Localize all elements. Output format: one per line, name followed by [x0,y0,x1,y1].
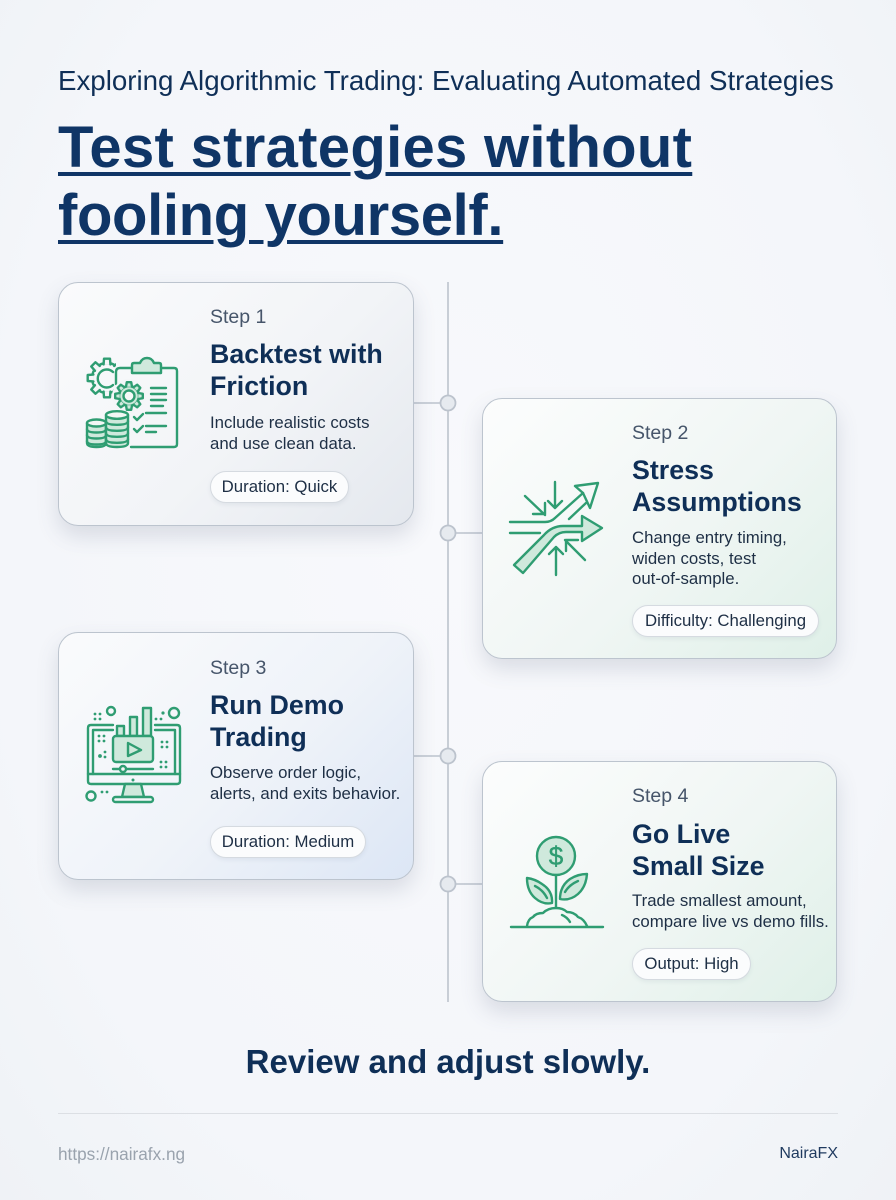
description: Change entry timing, [632,528,787,547]
description [632,528,787,588]
description: out-of-sample. [632,569,739,588]
description: and use clean data. [210,434,356,453]
heading [210,339,383,401]
icon: monitor with video chart [85,706,182,804]
icon: stress arrows [508,480,604,576]
heading: Trading [210,722,307,752]
pill: Duration: Quick [222,477,337,496]
title: fooling yourself. [58,182,503,248]
description [210,763,400,803]
icon: money plant [510,836,604,928]
panel: step 3 [58,632,414,880]
heading: Assumptions [632,487,802,517]
description: compare live vs demo fills. [632,912,829,931]
step label: Step 1 [210,306,266,328]
subtitle: Exploring Algorithmic Trading: Evaluating Automated Strategies [58,65,834,96]
heading: Run Demo [210,690,344,720]
panel: step 2 [482,398,837,659]
description: Observe order logic, [210,763,361,782]
footer url: https://nairafx.ng [58,1144,185,1164]
description [632,891,829,931]
icon: clipboard gears coins [86,356,178,448]
description [210,413,370,453]
description: alerts, and exits behavior. [210,784,400,803]
pill [210,471,349,503]
pill [632,605,819,637]
heading: Stress [632,455,714,485]
panel: step 4 [482,761,837,1002]
step label: Step 3 [210,657,266,679]
description: widen costs, test [632,549,756,568]
panel: step 1 [58,282,414,526]
title [58,115,692,248]
pill: Duration: Medium [222,832,354,851]
pill [632,948,751,980]
dollar sign: $ [549,841,564,871]
closing line: Review and adjust slowly. [246,1043,650,1080]
heading [210,690,344,752]
footer divider [58,1113,838,1114]
footer brand: NairaFX [779,1145,838,1162]
heading [632,455,802,517]
step label: Step 2 [632,422,688,444]
heading: Backtest with [210,339,383,369]
description: Include realistic costs [210,413,370,432]
title: Test strategies without [58,115,692,180]
pill: Output: High [644,954,739,973]
heading: Friction [210,371,308,401]
step label: Step 4 [632,785,688,807]
pill [210,826,366,858]
description: Trade smallest amount, [632,891,807,910]
heading [632,819,765,881]
heading: Go Live [632,819,730,849]
heading: Small Size [632,851,765,881]
pill: Difficulty: Challenging [645,611,806,630]
